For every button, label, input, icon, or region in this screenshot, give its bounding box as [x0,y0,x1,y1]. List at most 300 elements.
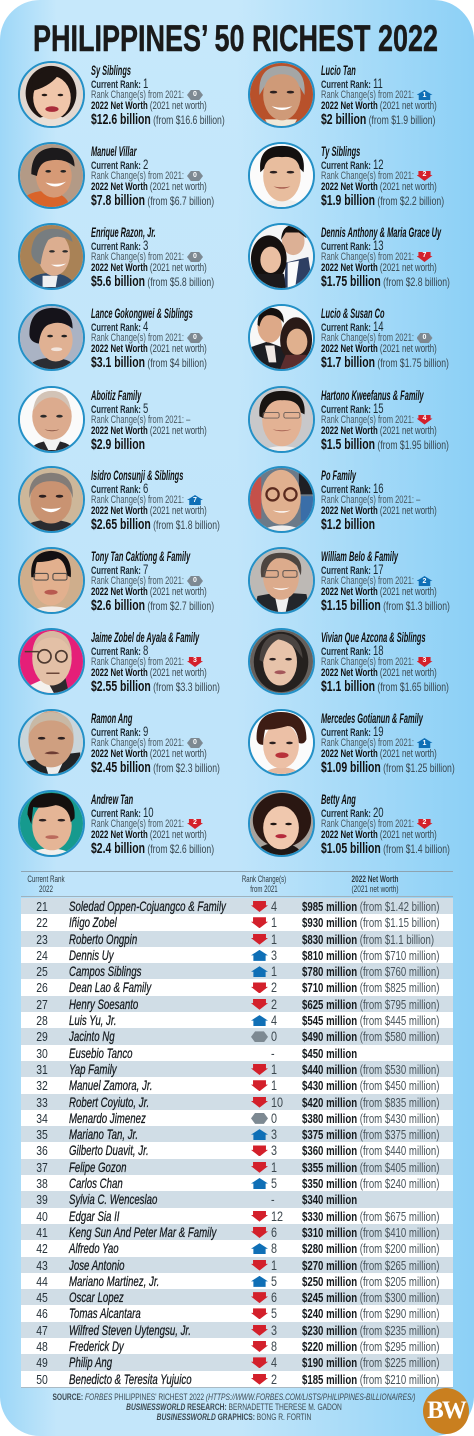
photo: Betty Ang [248,790,314,857]
table rows: ranks 21 to 50: $360 million (from $440 million) [302,1143,439,1158]
details: Vivian Que Azcona & Siblings: Rank Change(s) from 2021: [320,656,413,668]
profile: Po Family [248,466,436,533]
table rows: ranks 21 to 50: 24 [36,948,48,963]
details: Po Family [320,467,436,533]
table header [21,871,453,897]
details: Lucio Tan: 1 [423,92,426,99]
photo: Manuel Villar [18,142,85,209]
details: Sy Siblings: $12.6 billion (from $16.6 billion) [91,112,225,128]
source credits: SOURCE: FORBES PHILIPPINES' RICHEST 2022 (HTTPS://WWW.FORBES.COM/LISTS/PHILIPPINES-BILLIONAIRES/) [52,1392,416,1403]
details: Ramon Ang: Current Rank: 9 [91,723,148,739]
table rows: ranks 21 to 50: 49 [36,1355,48,1370]
details: Hartono Kweefanus & Family: Rank Change(s) from 2021: [320,414,413,426]
table rows: ranks 21 to 50: Frederick Dy [69,1338,124,1354]
table rows: ranks 21 to 50: $810 million (from $710 million) [302,948,439,963]
details: Mercedes Gotianun & Family: Mercedes Gotianun & Family [320,710,422,726]
photo: Tony Tan Caktiong [18,547,85,614]
table rows: ranks 21 to 50: $190 million (from $225 million) [302,1355,439,1370]
table rows: ranks 21 to 50: $240 million (from $290 million) [302,1306,439,1321]
photo: Andrew Tan [18,790,85,857]
details: Manuel Villar: Rank Change(s) from 2021: [91,170,184,182]
column header: current rank: 2022 [39,884,53,895]
details: Manuel Villar: 0 [193,172,197,179]
details: Lucio & Susan Co: 0 [423,334,426,341]
table rows: ranks 21 to 50: 37 [36,1160,48,1175]
table rows: ranks 21 to 50: $280 million (from $200 million) [302,1241,439,1256]
details: Lucio Tan: 2022 Net Worth (2021 net worth) [320,100,436,112]
details: Betty Ang: 2022 Net Worth (2021 net worth) [320,829,436,841]
details: Lance Gokongwei & Siblings: Rank Change(s) from 2021: [91,332,184,344]
table rows: ranks 21 to 50: Keng Sun And Peter Mar & Family [69,1224,216,1240]
photo: Lucio Tan [248,61,314,128]
table rows: ranks 21 to 50: Oscar Lopez [69,1289,124,1305]
details: Andrew Tan: Andrew Tan [91,791,133,807]
details: Po Family: 2022 Net Worth (2021 net worth) [320,505,436,517]
table rows: ranks 21 to 50: 31 [36,1062,48,1077]
details: Jaime Zobel de Ayala & Family: $2.55 billion (from $3.3 billion) [91,679,220,695]
details: Ty Siblings: Ty Siblings [320,143,360,159]
table rows: ranks 21 to 50: 27 [36,997,48,1012]
table rows: ranks 21 to 50: 21 [36,899,48,914]
details: Tony Tan Caktiong & Family: 2022 Net Worth (2021 net worth) [91,586,207,598]
table rows: ranks 21 to 50: $930 million (from $1.15 billion) [302,915,439,930]
details: Isidro Consunji & Siblings: Isidro Consunji & Siblings [91,467,183,483]
details: Lucio & Susan Co: $1.7 billion (from $1.75 billion) [320,355,448,371]
table rows: ranks 21 to 50: 40 [36,1209,48,1224]
details: Sy Siblings: Current Rank: 1 [91,75,148,91]
profile: Isidro Consunji & Siblings [18,466,220,533]
details: Isidro Consunji & Siblings: 7 [193,497,197,504]
table rows: ranks 21 to 50: Wilfred Steven Uytengsu, Jr. [69,1322,191,1338]
column header: net worth [351,874,399,895]
details: Andrew Tan: 2 [193,819,197,826]
table rows: ranks 21 to 50: Alfredo Yao [69,1240,119,1256]
table rows: ranks 21 to 50: 3 [271,1323,277,1338]
details: Ty Siblings: Current Rank: 12 [320,156,383,172]
table rows: ranks 21 to 50: Campos Siblings [69,963,141,979]
column header: current rank [27,874,65,895]
table rows: ranks 21 to 50: $985 million (from $1.42 billion) [302,899,439,914]
table rows: ranks 21 to 50: 32 [36,1078,48,1093]
details: Lance Gokongwei & Siblings: $3.1 billion (from $4 billion) [91,355,207,371]
profile: Dennis Anthony & Maria Grace Uy [248,223,450,290]
details: William Belo & Family: 2 [423,578,426,585]
table rows: ranks 21 to 50: 3 [271,1143,277,1158]
table rows: ranks 21 to 50: Gilberto Duavit, Jr. [69,1142,149,1158]
details: Tony Tan Caktiong & Family: Rank Change(s) from 2021: [91,575,184,587]
profile: Hartono Kweefanus & Family [248,386,448,453]
profile: Andrew Tan [18,790,214,857]
details: Tony Tan Caktiong & Family: Current Rank: 7 [91,561,148,577]
table rows: ranks 21 to 50: 47 [36,1323,48,1338]
details: Lance Gokongwei & Siblings: Current Rank: 4 [91,318,148,334]
details: Tony Tan Caktiong & Family: Tony Tan Caktiong & Family [91,548,190,564]
details: Sy Siblings: 0 [193,91,197,98]
details: Dennis Anthony & Maria Grace Uy [320,224,450,290]
table rows: ranks 21 to 50: 8 [271,1241,277,1256]
details: Mercedes Gotianun & Family: $1.09 billion (from $1.25 billion) [320,760,454,776]
details: Enrique Razon, Jr.: Enrique Razon, Jr. [91,224,156,240]
table rows: ranks 21 to 50: Menardo Jimenez [69,1110,146,1126]
details: Lance Gokongwei & Siblings: Lance Gokongwei & Siblings [91,305,193,321]
photo: Ramon Ang [18,709,85,776]
table rows: ranks 21 to 50: 30 [36,1046,48,1061]
column header: net worth: (2021 net worth) [351,884,399,895]
details: Betty Ang [320,791,450,857]
details: Isidro Consunji & Siblings: $2.65 billion (from $1.8 billion) [91,517,220,533]
table rows: ranks 21 to 50: $625 million (from $795 million) [302,997,439,1012]
details: Manuel Villar: $7.8 billion (from $6.7 billion) [91,193,214,209]
details: Vivian Que Azcona & Siblings: $1.1 billion (from $1.65 billion) [320,679,448,695]
details: Isidro Consunji & Siblings: 2022 Net Worth (2021 net worth) [91,505,207,517]
source credits [52,1392,416,1423]
table rows: ranks 21 to 50: Dean Lao & Family [69,979,151,995]
details: Tony Tan Caktiong & Family: $2.6 billion (from $2.7 billion) [91,598,214,614]
details: Isidro Consunji & Siblings [91,467,220,533]
details: Tony Tan Caktiong & Family: 0 [193,577,197,584]
details: Dennis Anthony & Maria Grace Uy: $1.75 billion (from $2.8 billion) [320,274,449,290]
table rows: ranks 21 to 50: Felipe Gozon [69,1159,126,1175]
details: Manuel Villar [91,143,214,209]
details: Betty Ang: $1.05 billion (from $1.4 billion) [320,841,449,857]
table rows: ranks 21 to 50: 38 [36,1176,48,1191]
table rows: ranks 21 to 50: Manuel Zamora, Jr. [69,1077,152,1093]
details: Lucio & Susan Co: Lucio & Susan Co [320,305,384,321]
details: Po Family: $1.2 billion [320,517,374,533]
details: Ramon Ang: $2.45 billion (from $2.3 billion) [91,760,220,776]
table rows: ranks 21 to 50: $310 million (from $410 million) [302,1225,439,1240]
details: Andrew Tan: $2.4 billion (from $2.6 billion) [91,841,214,857]
details: Hartono Kweefanus & Family: Current Rank: 15 [320,400,383,416]
table rows: ranks 21 to 50: 36 [36,1143,48,1158]
details: William Belo & Family: 2022 Net Worth (2021 net worth) [320,586,436,598]
table rows: ranks 21 to 50: 39 [36,1192,48,1207]
table rows: ranks 21 to 50: $270 million (from $265 million) [302,1258,439,1273]
table rows: ranks 21 to 50: 42 [36,1241,48,1256]
table rows: ranks 21 to 50: 4 [271,899,277,914]
details: Jaime Zobel de Ayala & Family [91,629,220,695]
profile: Mercedes Gotianun & Family [248,709,454,776]
profile: Vivian Que Azcona & Siblings [248,628,448,695]
details: Aboitiz Family: 2022 Net Worth (2021 net worth) [91,424,207,436]
details: Manuel Villar: Current Rank: 2 [91,156,148,172]
table rows: ranks 21 to 50: $250 million (from $205 million) [302,1274,439,1289]
details: Hartono Kweefanus & Family: 4 [423,414,426,422]
column header: rank change [242,874,286,895]
table rows: ranks 21 to 50: Benedicto & Teresita Yujuico [69,1371,192,1387]
photo: William Belo [248,547,314,614]
details: Aboitiz Family: $2.9 billion [91,436,145,452]
table rows: ranks 21 to 50: $490 million (from $580 million) [302,1029,439,1044]
table rows: ranks 21 to 50: 2 [271,1372,277,1387]
table rows: ranks 21 to 50: $710 million (from $825 million) [302,980,439,995]
photo: Dennis Anthony & Maria Grace Uy [248,223,314,290]
table rows: ranks 21 to 50: 1 [271,1078,277,1093]
table rows: ranks 21 to 50: 48 [36,1339,48,1354]
details: Ty Siblings: 2 [423,171,426,178]
details: Vivian Que Azcona & Siblings: 3 [423,657,426,664]
photo: Po Family [248,466,314,533]
details: Lucio Tan: Lucio Tan [320,62,355,78]
profile: Enrique Razon, Jr. [18,223,214,290]
table rows: ranks 21 to 50: 1 [271,932,277,947]
table rows: ranks 21 to 50: Tomas Alcantara [69,1305,141,1321]
table rows: ranks 21 to 50: Carlos Chan [69,1175,123,1191]
source credits: BUSINESSWORLD GRAPHICS: BONG R. FORTIN [157,1412,311,1423]
details: Vivian Que Azcona & Siblings: 2022 Net Worth (2021 net worth) [320,667,436,679]
photo: Hartono Kweefanus [248,386,314,452]
table rows: ranks 21 to 50: $380 million (from $430 million) [302,1111,439,1126]
table rows: ranks 21 to 50: 1 [271,915,277,930]
table rows: ranks 21 to 50: Sylvia C. Wenceslao [69,1191,157,1207]
table rows: ranks 21 to 50: Iñigo Zobel [69,914,117,930]
table rows: ranks 21 to 50: 4 [271,1355,277,1370]
table rows: ranks 21 to 50: Jacinto Ng [69,1028,115,1044]
details: Andrew Tan: Rank Change(s) from 2021: [91,818,184,830]
table rows: ranks 21 to 50: 1 [271,1258,277,1273]
table rows: ranks 21 to 50: $185 million (from $210 million) [302,1372,439,1387]
details: Andrew Tan: 2022 Net Worth (2021 net worth) [91,829,207,841]
details: Mercedes Gotianun & Family: 2022 Net Worth (2021 net worth) [320,748,436,760]
profile: Lucio Tan [248,61,436,128]
profile: Manuel Villar [18,142,214,209]
table rows: ranks 21 to 50: 6 [271,1225,277,1240]
details: Enrique Razon, Jr.: 2022 Net Worth (2021 net worth) [91,262,207,274]
details: Lucio Tan: Current Rank: 11 [320,75,382,91]
details: Vivian Que Azcona & Siblings [320,629,448,695]
details: Andrew Tan [90,791,214,857]
details: Ty Siblings: 2022 Net Worth (2021 net worth) [320,181,436,193]
table rows: ranks 21 to 50: 25 [36,964,48,979]
details: William Belo & Family: Current Rank: 17 [320,561,383,577]
table rows: ranks 21 to 50: $245 million (from $300 million) [302,1290,439,1305]
details: Po Family: Po Family [320,467,356,483]
details: Dennis Anthony & Maria Grace Uy: Current Rank: 13 [320,237,383,253]
details: Jaime Zobel de Ayala & Family: 3 [193,657,197,664]
details: Lucio & Susan Co [320,305,448,371]
details: Andrew Tan: Current Rank: 10 [91,804,154,820]
table rows: ranks 21 to 50: 41 [36,1225,48,1240]
table rows: ranks 21 to 50: $440 million (from $530 million) [302,1062,439,1077]
table rows: ranks 21 to 50: 6 [271,1290,277,1305]
details: Lance Gokongwei & Siblings: 0 [193,334,197,341]
table rows: ranks 21 to 50: 44 [36,1274,48,1289]
table rows: ranks 21 to 50: Dennis Uy [69,947,114,963]
table rows: ranks 21 to 50: 1 [271,964,277,979]
details: Sy Siblings: Rank Change(s) from 2021: [91,89,184,101]
table rows: ranks 21 to 50: $330 million (from $675 million) [302,1209,439,1224]
table rows: ranks 21 to 50: $230 million (from $235 million) [302,1323,439,1338]
table rows: ranks 21 to 50: 29 [36,1029,48,1044]
profile: Lance Gokongwei & Siblings [18,304,207,371]
profile: Betty Ang [248,790,450,857]
details: Jaime Zobel de Ayala & Family: Current Rank: 8 [91,642,148,658]
details: Isidro Consunji & Siblings: Rank Change(s) from 2021: [91,494,184,506]
details: Lucio & Susan Co: Current Rank: 14 [320,318,383,334]
photo: Enrique Razon, Jr. [18,223,85,290]
details: Aboitiz Family: Current Rank: 5 [91,400,148,416]
details: Lucio & Susan Co: Rank Change(s) from 2021: [320,332,413,344]
column header: current rank: Current Rank [27,874,65,884]
profile: Tony Tan Caktiong & Family [18,547,214,614]
table rows: ranks 21 to 50: 0 [271,1111,277,1126]
details: Enrique Razon, Jr.: Rank Change(s) from 2021: [91,251,184,263]
details: Tony Tan Caktiong & Family [91,548,214,614]
table rows: ranks 21 to 50: - [271,1192,275,1207]
details: Lucio Tan [320,62,436,128]
table rows: ranks 21 to 50: 28 [36,1013,48,1028]
table rows: ranks 21 to 50: 12 [271,1209,283,1224]
table rows: ranks 21 to 50: $340 million [302,1192,357,1207]
details: Ramon Ang: 2022 Net Worth (2021 net worth) [91,748,207,760]
details: William Belo & Family: William Belo & Family [320,548,398,564]
table rows: ranks 21 to 50: $830 million (from $1.1 billion) [302,932,434,947]
details: Dennis Anthony & Maria Grace Uy: Rank Change(s) from 2021: [320,251,413,263]
details: Jaime Zobel de Ayala & Family: Rank Change(s) from 2021: [91,656,184,668]
details: Po Family: Rank Change(s) from 2021: – [320,494,420,506]
photo: Vivian Que Azcona [248,628,314,695]
table rows: ranks 21 to 50: 34 [36,1111,48,1126]
table rows: ranks 21 to 50: Mariano Tan, Jr. [69,1126,138,1142]
table rows: ranks 21 to 50: 1 [271,1160,277,1175]
table rows: ranks 21 to 50: 43 [36,1258,48,1273]
details: Aboitiz Family [90,386,207,452]
table rows: ranks 21 to 50: Roberto Ongpin [69,931,137,947]
source credits: BUSINESSWORLD RESEARCH: BERNADETTE THERESE M. GADON [126,1402,342,1413]
table rows: ranks 21 to 50: $355 million (from $405 million) [302,1160,439,1175]
details: Hartono Kweefanus & Family: $1.5 billion (from $1.95 billion) [320,436,448,452]
photo: Jaime Zobel de Ayala [18,628,85,695]
details: Ramon Ang: Rank Change(s) from 2021: [91,737,184,749]
photo: Isidro Consunji [18,466,85,533]
details: William Belo & Family: Rank Change(s) from 2021: [320,575,413,587]
table rows: ranks 21 to 50: 45 [36,1290,48,1305]
table rows: ranks 21 to 50: $450 million [302,1046,357,1061]
details: Ty Siblings [320,143,444,209]
details: Enrique Razon, Jr.: 0 [193,253,197,260]
details: Betty Ang: Rank Change(s) from 2021: [320,818,413,830]
table rows: ranks 21 to 50: Mariano Martinez, Jr. [69,1273,159,1289]
table rows: ranks 21 to 50: Yap Family [69,1061,117,1077]
details: Sy Siblings [91,62,225,128]
details: Mercedes Gotianun & Family: Rank Change(s) from 2021: [320,737,413,749]
photo: Lance Gokongwei [18,304,85,371]
table rows: ranks 21 to 50: 5 [271,1274,277,1289]
table rows: ranks 21 to 50: 22 [36,915,48,930]
details: Lucio & Susan Co: 2022 Net Worth (2021 net worth) [320,343,436,355]
details: Betty Ang: Betty Ang [320,791,355,807]
profile: Ramon Ang [18,709,220,776]
photo: Ty Siblings [248,142,314,209]
details: Vivian Que Azcona & Siblings: Vivian Que Azcona & Siblings [320,629,425,645]
table rows: ranks 21 to 50: 2 [271,980,277,995]
details: Lance Gokongwei & Siblings: 2022 Net Worth (2021 net worth) [91,343,207,355]
details: Aboitiz Family: Aboitiz Family [91,386,141,402]
details: Mercedes Gotianun & Family: 1 [423,740,426,747]
details: Po Family: Current Rank: 16 [320,480,383,496]
table rows: ranks 21 to 50: 3 [271,1127,277,1142]
table rows: ranks 21 to 50 [21,898,453,1388]
details: Lucio Tan: Rank Change(s) from 2021: [320,89,413,101]
table rows: ranks 21 to 50: Henry Soesanto [69,996,138,1012]
table rows: ranks 21 to 50: 5 [271,1306,277,1321]
table rows: ranks 21 to 50: Eusebio Tanco [69,1045,133,1061]
details: Hartono Kweefanus & Family [320,386,448,452]
photo: Sy Siblings [18,61,85,128]
column header: net worth: 2022 Net Worth [352,874,398,884]
details: Sy Siblings: 2022 Net Worth (2021 net worth) [91,100,207,112]
table rows: ranks 21 to 50: Philip Ang [69,1354,112,1370]
table rows: ranks 21 to 50: $420 million (from $835 million) [302,1095,439,1110]
table rows: ranks 21 to 50: 5 [271,1176,277,1191]
details: Isidro Consunji & Siblings: Current Rank: 6 [91,480,148,496]
photo: Aboitiz Family [18,386,85,452]
details: William Belo & Family [320,548,450,614]
details: Dennis Anthony & Maria Grace Uy: 2022 Net Worth (2021 net worth) [320,262,436,274]
details: Betty Ang: Current Rank: 20 [320,804,383,820]
details: Jaime Zobel de Ayala & Family: Jaime Zobel de Ayala & Family [91,629,199,645]
table rows: ranks 21 to 50: 3 [271,948,277,963]
column header: rank change: from 2021 [250,884,278,895]
table rows: ranks 21 to 50: Jose Antonio [69,1257,125,1273]
details: Hartono Kweefanus & Family: Hartono Kweefanus & Family [320,386,423,402]
table rows: ranks 21 to 50: 50 [36,1372,48,1387]
table rows: ranks 21 to 50: $350 million (from $240 million) [302,1176,439,1191]
table rows: ranks 21 to 50: $545 million (from $445 million) [302,1013,439,1028]
details: Hartono Kweefanus & Family: 2022 Net Worth (2021 net worth) [320,424,436,436]
details: Sy Siblings: Sy Siblings [91,62,131,78]
table rows: ranks 21 to 50: Robert Coyiuto, Jr. [69,1094,149,1110]
details: Ty Siblings: Rank Change(s) from 2021: [320,170,413,182]
details: Mercedes Gotianun & Family: Current Rank: 19 [320,723,383,739]
details: Mercedes Gotianun & Family [320,710,454,776]
table rows: ranks 21 to 50: 35 [36,1127,48,1142]
details: Aboitiz Family: Rank Change(s) from 2021: – [91,414,190,426]
details: Dennis Anthony & Maria Grace Uy: Dennis Anthony & Maria Grace Uy [320,224,441,240]
details: Betty Ang: 2 [423,819,426,826]
details: Lucio Tan: $2 billion (from $1.9 billion) [320,112,435,128]
details: Vivian Que Azcona & Siblings: Current Rank: 18 [320,642,383,658]
table rows: ranks 21 to 50: $780 million (from $760 million) [302,964,439,979]
details: Lance Gokongwei & Siblings [91,305,207,371]
photo: Lucio & Susan Co [248,304,314,371]
table rows: ranks 21 to 50: $430 million (from $450 million) [302,1078,439,1093]
table rows: ranks 21 to 50: 8 [271,1339,277,1354]
table rows: ranks 21 to 50: - [271,1046,275,1061]
details: Manuel Villar: 2022 Net Worth (2021 net worth) [91,181,207,193]
details: Enrique Razon, Jr.: $5.6 billion (from $5.8 billion) [91,274,214,290]
details: Jaime Zobel de Ayala & Family: 2022 Net Worth (2021 net worth) [91,667,207,679]
table rows: ranks 21 to 50: Soledad Oppen-Cojuangco & Family [69,898,226,914]
profile: Jaime Zobel de Ayala & Family [18,628,220,695]
photo: Mercedes Gotianun [248,709,314,776]
details: Enrique Razon, Jr.: Current Rank: 3 [91,237,148,253]
details: Ty Siblings: $1.9 billion (from $2.2 billion) [320,193,444,209]
table rows: ranks 21 to 50: 1 [271,1062,277,1077]
details: Ramon Ang: 0 [193,739,197,746]
details: William Belo & Family: $1.15 billion (from $1.3 billion) [320,598,449,614]
details: Ramon Ang: Ramon Ang [91,710,132,726]
column header: rank change: Rank Change(s) [242,874,286,884]
table rows: ranks 21 to 50: 0 [271,1029,277,1044]
details: Dennis Anthony & Maria Grace Uy: 7 [423,252,426,259]
details: Enrique Razon, Jr. [91,224,214,290]
BusinessWorld logo [423,1388,469,1434]
table rows: ranks 21 to 50: 2 [271,997,277,1012]
table rows: ranks 21 to 50: Luis Yu, Jr. [69,1012,116,1028]
table rows: ranks 21 to 50: 10 [271,1095,283,1110]
profile: William Belo & Family [248,547,450,614]
